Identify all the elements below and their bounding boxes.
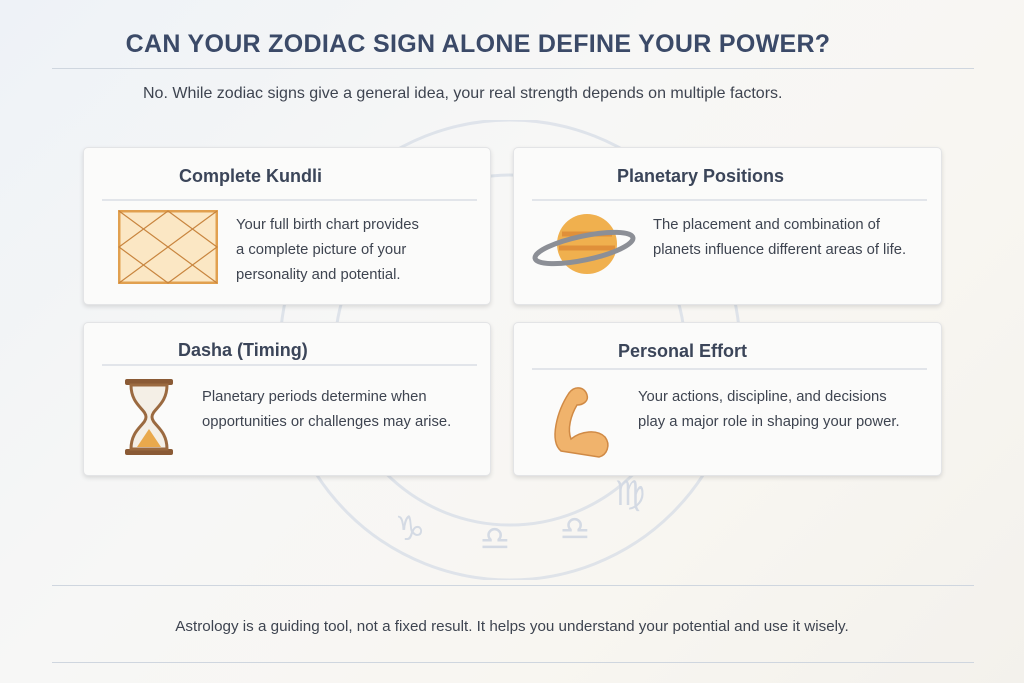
panel: complete kundli: personality and potential.: [236, 267, 401, 283]
panel: planetary positions: Planetary Positions: [617, 166, 784, 186]
panel: planetary positions: [513, 147, 942, 305]
background zodiac wheel: ♎: [560, 509, 590, 549]
icon: saturn: [532, 214, 636, 274]
icon: flexed arm: [554, 387, 609, 458]
panel: complete kundli: [83, 147, 491, 305]
footer text: Astrology is a guiding tool, not a fixed result. It helps you understand your potential and use it wisely.: [175, 618, 849, 635]
panel: planetary positions: The placement and combination of: [653, 217, 880, 233]
panel: personal effort: [513, 322, 942, 476]
panel: complete kundli: Your full birth chart provides: [236, 217, 419, 233]
icon: hourglass: [125, 379, 173, 455]
panel: personal effort: Personal Effort: [618, 341, 747, 361]
background zodiac wheel: [280, 120, 740, 580]
panel: dasha: opportunities or challenges may arise.: [202, 414, 451, 430]
panel: personal effort: Your actions, discipline, and decisions: [638, 389, 887, 405]
icon: kundli chart: [118, 210, 218, 284]
background zodiac wheel: ♑: [395, 509, 425, 549]
panel: dasha: Dasha (Timing): [178, 340, 308, 360]
panel: dasha: [83, 322, 491, 476]
background zodiac wheel: ♍: [615, 474, 645, 514]
panel: dasha: Planetary periods determine when: [202, 389, 427, 405]
panel: planetary positions: planets influence different areas of life.: [653, 242, 906, 258]
panel: personal effort: play a major role in shaping your power.: [638, 414, 900, 430]
subtitle: No. While zodiac signs give a general idea, your real strength depends on multiple factors.: [143, 85, 782, 102]
panel: complete kundli: a complete picture of your: [236, 242, 406, 258]
background zodiac wheel: ♎: [480, 519, 510, 559]
panel: complete kundli: Complete Kundli: [179, 166, 322, 186]
title: CAN YOUR ZODIAC SIGN ALONE DEFINE YOUR POWER?: [126, 30, 830, 58]
